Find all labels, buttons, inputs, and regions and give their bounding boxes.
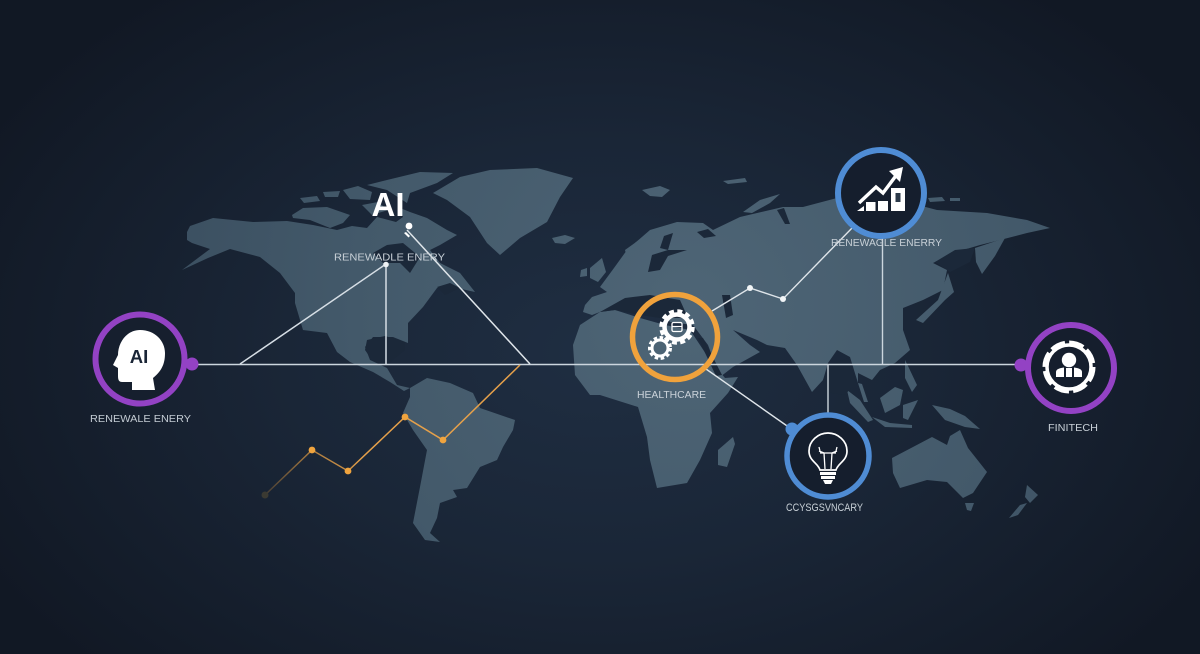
white trend line xyxy=(712,227,853,311)
connector dot: fintech xyxy=(1014,358,1028,372)
Gulf of Ob xyxy=(777,208,790,224)
orange trend line xyxy=(262,365,520,498)
Sea of Okhotsk xyxy=(935,248,975,272)
Gulf of Mexico xyxy=(365,336,405,366)
label: cybersecurity garbled: CCYSGSVNCARY xyxy=(786,502,864,514)
Baltic Sea xyxy=(648,233,687,272)
label: fintech: FINITECH xyxy=(1048,422,1098,434)
node point: North America xyxy=(383,262,389,267)
node: healthcare xyxy=(632,294,718,401)
icon: gear ring xyxy=(1044,342,1094,392)
northern small islands xyxy=(723,178,960,202)
label: healthcare: HEALTHCARE xyxy=(637,389,706,401)
triangle connector: North America xyxy=(240,264,386,364)
label: renewable energy left: RENEWALE ENERY xyxy=(90,413,191,425)
connector dot: bulb xyxy=(786,422,798,436)
Svalbard and Novaya Zemlya xyxy=(642,186,780,213)
white points xyxy=(747,285,786,302)
world map xyxy=(182,168,1050,542)
Japan xyxy=(916,273,954,323)
Borneo xyxy=(880,387,903,413)
New Zealand xyxy=(1009,485,1038,518)
icon: bar chart with arrow xyxy=(857,167,905,211)
icon: head xyxy=(113,330,165,390)
label: renewable energy north america: RENEWADLE ENERY xyxy=(334,252,445,264)
vertical connector to bulb node xyxy=(827,364,829,414)
connector dot: AI xyxy=(186,358,198,370)
diagonal connector to bulb node xyxy=(706,369,790,428)
Red Sea xyxy=(698,338,722,376)
Kamchatka xyxy=(975,238,1005,274)
Malay Peninsula xyxy=(858,383,868,402)
Sumatra and Java xyxy=(847,390,912,428)
Bay of Bengal xyxy=(823,358,856,395)
AI heading: AI xyxy=(372,186,404,223)
ring: healthcare xyxy=(632,294,718,380)
Tasmania xyxy=(965,503,974,511)
Scandinavia and British Isles xyxy=(580,232,662,282)
ring: bulb xyxy=(787,415,869,497)
icon: large gear xyxy=(661,311,693,343)
Mediterranean Sea xyxy=(600,295,688,318)
inland seas xyxy=(365,208,975,395)
icon text: AI: AI xyxy=(130,346,148,367)
marker: AI pin xyxy=(404,223,412,238)
Greenland xyxy=(433,168,573,255)
first orange point xyxy=(262,492,268,498)
icon: small gear xyxy=(650,338,670,358)
Hudson Bay xyxy=(373,243,420,273)
Gulf of St Lawrence xyxy=(437,283,460,295)
node: innovation bulb xyxy=(786,415,869,514)
Australia xyxy=(892,430,987,498)
diagonal connector from AI marker xyxy=(407,230,530,364)
Eurasia xyxy=(583,195,1050,392)
Madagascar xyxy=(718,437,735,467)
Philippines and Sulawesi xyxy=(903,360,918,420)
ring: chart xyxy=(838,150,924,236)
ring: AI xyxy=(96,314,184,404)
Iceland xyxy=(552,235,575,244)
White Sea xyxy=(697,229,716,238)
main horizontal connector xyxy=(190,364,1022,366)
Caspian Sea xyxy=(722,295,733,318)
icon: person xyxy=(1056,353,1082,377)
node: fintech xyxy=(1014,325,1114,434)
ring: fintech xyxy=(1028,325,1114,411)
North America xyxy=(182,208,475,391)
Arctic islands xyxy=(292,172,453,228)
node: AI xyxy=(90,314,198,425)
Africa xyxy=(573,310,738,488)
South America xyxy=(403,378,515,542)
icon: light bulb xyxy=(809,433,847,484)
orange points xyxy=(309,414,446,474)
node: growth chart xyxy=(831,150,942,249)
label: renewable energy top right: RENEWAGLE ENERRY xyxy=(831,237,942,249)
New Guinea xyxy=(932,405,980,429)
vertical connector to chart node xyxy=(882,232,884,364)
